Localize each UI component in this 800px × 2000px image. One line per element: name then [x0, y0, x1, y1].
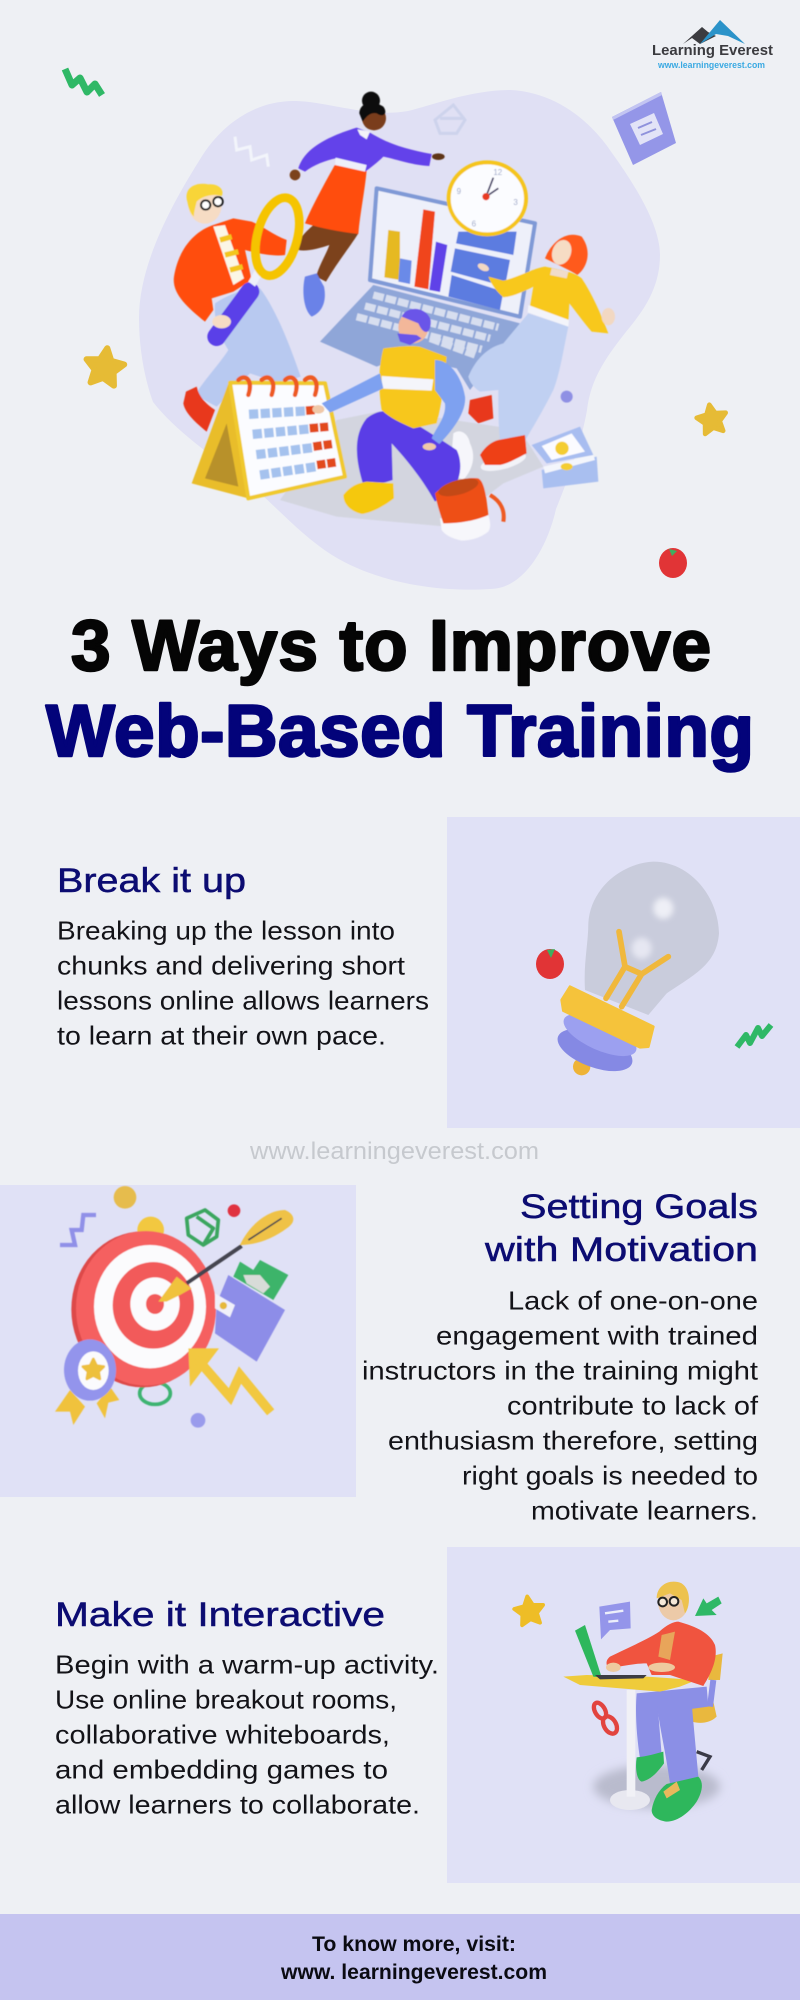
watermark: www.learningeverest.com [249, 1138, 539, 1165]
laptop [575, 1625, 647, 1679]
green arrow [695, 1597, 722, 1616]
body text: instructors in the training might [362, 1356, 759, 1386]
body text: collaborative whiteboards, [55, 1720, 390, 1750]
body text: Begin with a warm-up activity. [55, 1650, 439, 1680]
green cube [187, 1210, 218, 1245]
heading: Break it up [57, 862, 246, 900]
footer band: www. learningeverest.com [280, 1961, 547, 1984]
body text [55, 1650, 439, 1820]
logo: Learning Everest: www.learningeverest.com [657, 60, 765, 71]
arrow [158, 1210, 293, 1302]
panel: Make it Interactive [55, 1547, 800, 1883]
body text: right goals is needed to [462, 1460, 758, 1490]
icon: book [612, 92, 676, 165]
heading: Make it Interactive [55, 1596, 385, 1634]
title line 2: Web-Based Training [46, 691, 754, 772]
title [46, 607, 754, 772]
chair [692, 1653, 723, 1770]
body text: engagement with trained [436, 1320, 758, 1350]
floor shadow [593, 1765, 720, 1808]
logo: Learning Everest [652, 20, 773, 71]
body text: allow learners to collaborate. [55, 1790, 420, 1820]
body text: Lack of one-on-one [508, 1286, 758, 1316]
star [513, 1594, 545, 1626]
panel: Setting Goals with Motivation [0, 1185, 759, 1526]
hero illustration: team around laptop [174, 92, 615, 541]
decorative wire cube [435, 105, 465, 133]
icon: apple [536, 949, 564, 979]
money stack [532, 427, 598, 488]
footer text: To know more, visit: [312, 1933, 516, 1956]
green ring [140, 1382, 170, 1404]
icon: green zigzag [737, 1025, 771, 1047]
dot [561, 391, 573, 403]
title line 1: 3 Ways to Improve [71, 607, 711, 686]
body text [57, 916, 429, 1050]
panel: Break it up [57, 817, 800, 1128]
logo: Learning Everest: Learning Everest [652, 43, 773, 59]
illustration: person at laptop [513, 1582, 723, 1822]
icon: apple [659, 548, 687, 578]
heading: Setting Goals [520, 1188, 758, 1226]
yellow cursor and bolt [188, 1348, 271, 1412]
decorative blob behind hero [139, 90, 660, 590]
clock: 9 [457, 187, 462, 196]
clock [449, 162, 526, 234]
woman in yellow sweater [468, 235, 615, 475]
icon: light bulb [552, 862, 719, 1080]
icon: star left [83, 346, 126, 387]
heading [484, 1188, 758, 1269]
laptop [320, 188, 535, 390]
body text [362, 1286, 759, 1526]
kneeling man [312, 309, 473, 514]
footer band [0, 1914, 800, 2000]
calendar [192, 377, 345, 498]
decorative white zigzag [235, 137, 268, 167]
body text: Use online breakout rooms, [55, 1684, 397, 1714]
wallet [215, 1260, 288, 1362]
icon: green zigzag top left [65, 69, 102, 95]
icon: star right [695, 402, 729, 435]
badge [55, 1339, 119, 1425]
panel background [447, 817, 800, 1128]
body text: Breaking up the lesson into [57, 916, 395, 946]
mug [435, 475, 504, 541]
target [71, 1231, 216, 1387]
body text: chunks and delivering short [57, 950, 406, 980]
body text: enthusiasm therefore, setting [388, 1426, 758, 1456]
body text: to learn at their own pace. [57, 1020, 386, 1050]
chain link [591, 1701, 620, 1736]
body text: and embedding games to [55, 1754, 388, 1784]
woman in purple sweater [290, 92, 445, 317]
purple stairs [60, 1215, 96, 1245]
clock: 3 [513, 198, 518, 207]
body text: motivate learners. [531, 1496, 758, 1526]
body text: contribute to lack of [507, 1390, 759, 1420]
clock: 12 [493, 168, 503, 177]
man with magnifier [174, 184, 307, 432]
purple dot [191, 1413, 205, 1428]
coins [114, 1186, 164, 1243]
heading: with Motivation [484, 1231, 758, 1269]
legs [636, 1687, 708, 1822]
clock: 6 [472, 220, 477, 229]
panel background [0, 1185, 356, 1497]
red dot [228, 1204, 240, 1217]
table top [563, 1675, 697, 1692]
illustration: target with arrow [55, 1186, 293, 1428]
table leg [610, 1690, 650, 1810]
panel background [447, 1547, 800, 1883]
upper body [606, 1582, 716, 1686]
floor shadow [280, 410, 543, 527]
chat bubble [599, 1602, 631, 1639]
body text: lessons online allows learners [57, 986, 429, 1016]
